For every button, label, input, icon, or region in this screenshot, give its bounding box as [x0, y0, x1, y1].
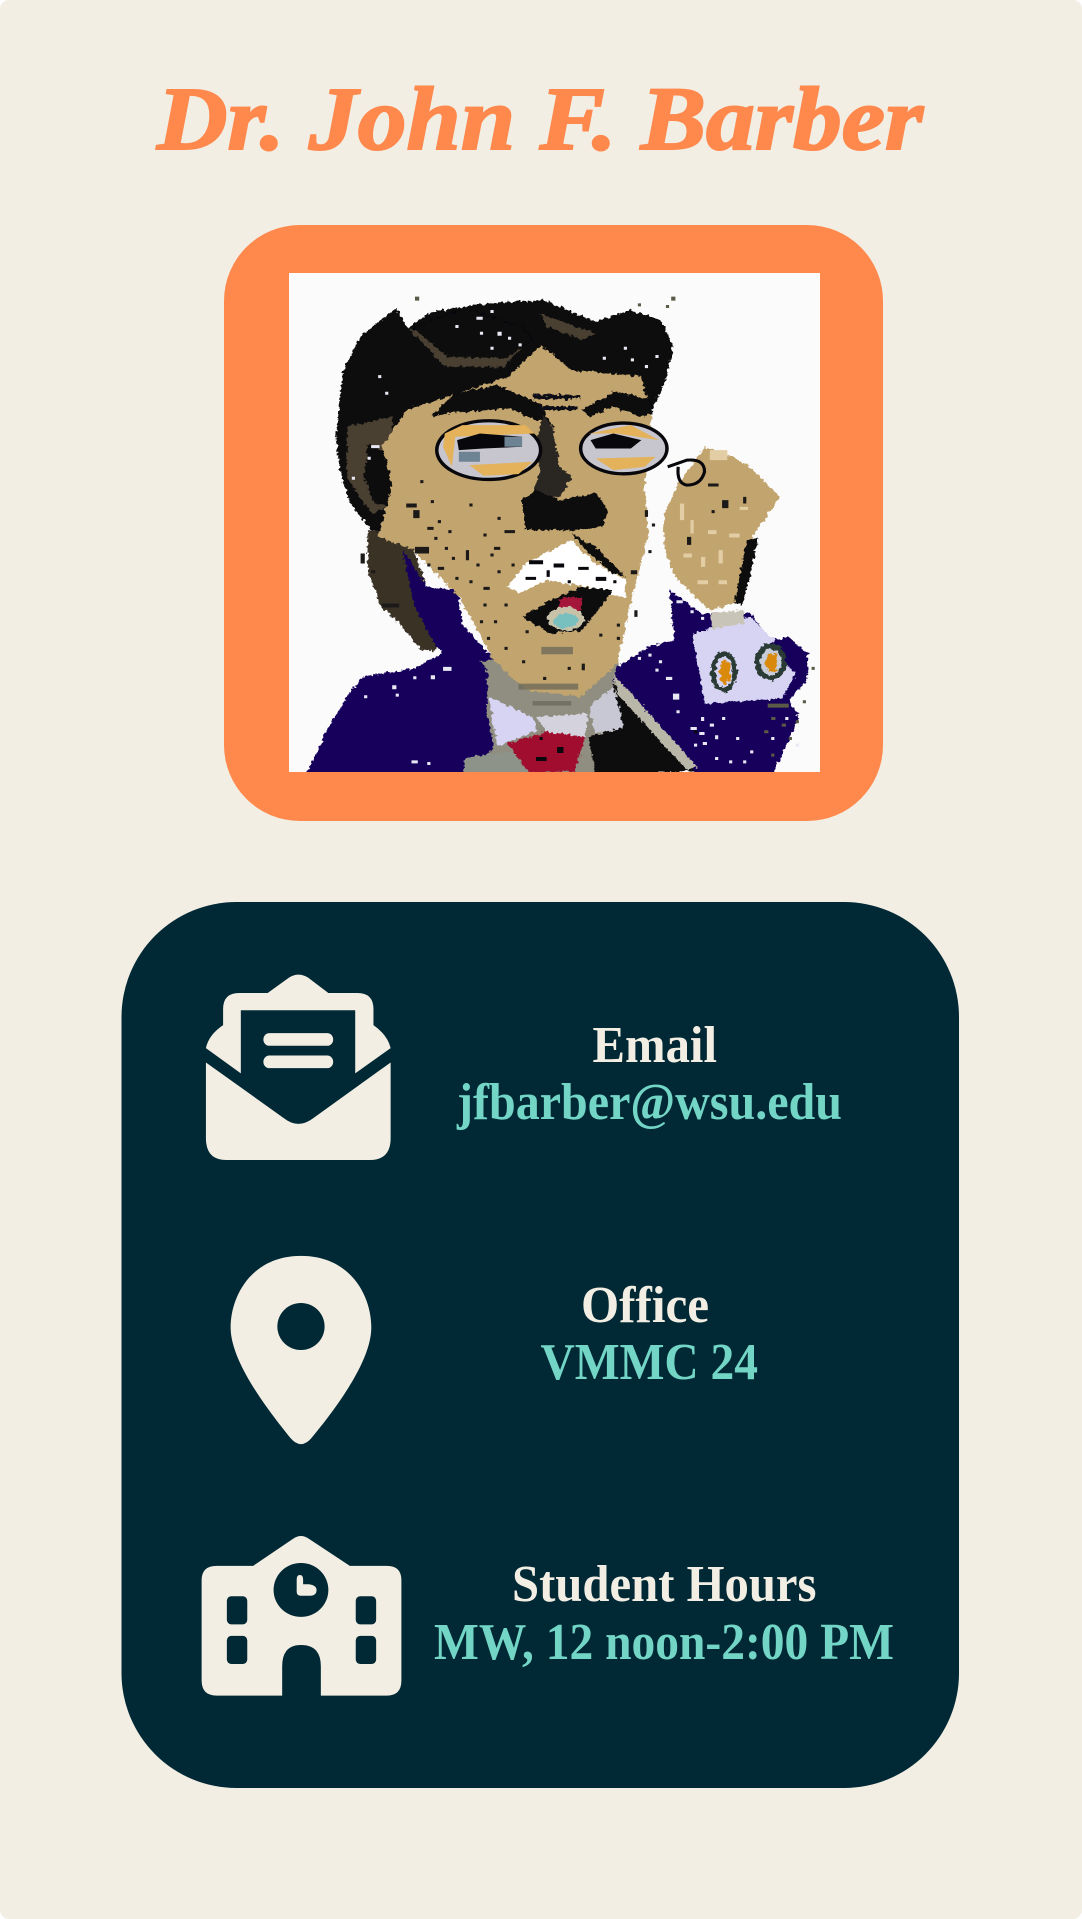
mouth	[522, 587, 613, 634]
student hours times: MW, 12 noon-2:00 PM	[434, 1614, 894, 1671]
glasses arm	[668, 460, 705, 485]
title: Dr. John F. Barber	[156, 70, 924, 169]
hair	[336, 300, 673, 537]
jacket left	[304, 647, 494, 777]
contact panel	[122, 902, 959, 1788]
shirt cuff	[692, 617, 796, 704]
jacket right and sleeve	[613, 590, 808, 777]
portrait frame	[224, 225, 883, 821]
face	[378, 345, 652, 697]
office label: Office	[581, 1277, 709, 1334]
speckles: dark face stipple	[361, 480, 746, 680]
portrait: caricature of Dr. Barber	[289, 273, 820, 772]
back hair sides	[368, 530, 445, 652]
speckles: hair and fray on sleeve	[415, 297, 815, 757]
icon: school building with clock	[202, 1536, 401, 1696]
forehead lines	[533, 395, 582, 399]
speckles: white flecks	[352, 310, 799, 765]
nose shadow	[533, 413, 571, 497]
speckles: pale highlights on hand	[680, 450, 748, 584]
right eye glass	[581, 423, 667, 474]
office room: VMMC 24	[540, 1334, 758, 1391]
shirt collar	[489, 697, 536, 747]
speckles: black flecks on goatee	[526, 560, 697, 761]
cufflink right	[754, 643, 787, 681]
icon: location pin	[231, 1256, 371, 1444]
icon: open envelope	[206, 975, 391, 1160]
white goatee	[508, 540, 626, 599]
student hours label: Student Hours	[512, 1556, 816, 1613]
email label: Email	[592, 1017, 717, 1074]
neck and shirt underlayer	[466, 654, 631, 777]
chin stubble shadow	[519, 647, 578, 706]
bow tie	[508, 732, 585, 774]
hand	[664, 447, 780, 610]
eyebrows	[431, 385, 554, 427]
cufflink left	[711, 651, 737, 693]
left eye glass	[437, 421, 541, 479]
email address: jfbarber@wsu.edu	[456, 1074, 842, 1131]
lapel	[589, 684, 694, 777]
mustache and nose	[522, 490, 608, 530]
